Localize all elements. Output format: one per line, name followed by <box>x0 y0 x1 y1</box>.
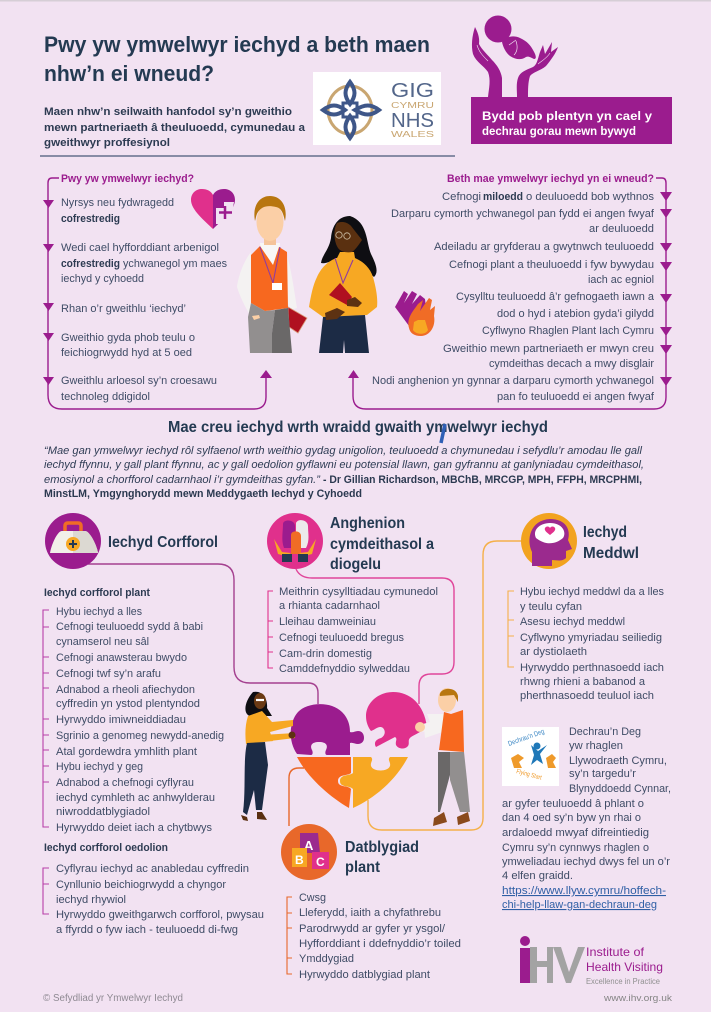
text block: children list: Adnabod a chefnogi cyflyrau <box>56 777 194 789</box>
logo: GIG Cymru NHS Wales: WALES <box>391 130 434 139</box>
subheading: adults: Iechyd corfforol oedolion <box>44 842 168 854</box>
icon: people in hands <box>267 513 323 569</box>
text block: children list: Cefnogi teuluoedd sydd â babi <box>56 621 203 633</box>
icon: alphabet blocks: B <box>295 853 304 867</box>
text block: children list: cynamserol neu sâl <box>56 636 149 648</box>
text block: social list: Cam-drin domestig <box>279 648 372 660</box>
puzzle piece: pink <box>366 692 427 749</box>
heading: social needs <box>330 515 434 573</box>
website: www.ihv.org.uk <box>603 993 672 1004</box>
text block: Flying Start: ardaloedd mwyaf difreintiedig <box>502 827 649 839</box>
text block: what list: Cefnogi <box>442 191 481 203</box>
text block: what list: o deuluoedd bob wythnos <box>526 191 654 203</box>
text block: children list: Hybu iechyd a lles <box>56 606 142 618</box>
heading: who: Pwy yw ymwelwyr iechyd? <box>61 173 194 185</box>
text block: children list: Cefnogi twf sy’n arafu <box>56 668 161 680</box>
text block: what list: ar deuluoedd <box>589 223 654 235</box>
text block: mental health list <box>520 586 664 702</box>
arrow: left flow line <box>43 178 272 409</box>
icon: alphabet blocks: A <box>304 838 314 853</box>
heading: mental health: Iechyd <box>583 524 627 541</box>
bracket: social <box>268 591 273 668</box>
title: Pwy yw ymwelwyr iechyd a beth maen <box>44 32 430 57</box>
panel: who are health visitors <box>43 173 272 409</box>
copyright: © Sefydliad yr Ymwelwyr Iechyd <box>43 993 183 1004</box>
text block: children list: iechyd cymhleth ac anhwylderau <box>56 792 215 804</box>
text block: adults list: Hyrwyddo gweithgarwch corfforol, pwysau <box>56 909 264 921</box>
bracket: children <box>43 610 49 827</box>
heading: child development: plant <box>345 859 381 876</box>
heading: social needs: cymdeithasol a <box>330 536 434 553</box>
text block: children list: Hybu iechyd y geg <box>56 761 143 773</box>
text block: adults list: Cynllunio beichiogrwydd a chyngor <box>56 879 226 891</box>
logo: Institute of Health Visiting <box>520 936 663 986</box>
text block: children list: Hyrwyddo imiwneiddiadau <box>56 714 186 726</box>
heading: child development: Datblygiad <box>345 839 419 856</box>
logo: Institute of Health Visiting: Health Visiting <box>586 960 663 974</box>
text block: social list: a rhianta cadarnhaol <box>279 600 380 612</box>
logo: GIG Cymru NHS Wales <box>313 72 441 145</box>
illustration: man with puzzle <box>415 688 470 826</box>
logo: GIG Cymru NHS Wales: GIG <box>391 80 434 102</box>
text block: Flying Start: Dechrau’n Deg <box>569 726 641 738</box>
arrow: right flow line <box>348 178 672 409</box>
puzzle piece: purple <box>291 704 364 755</box>
heading: health creation: Mae creu iechyd wrth wraidd gwaith ymwelwyr iechyd <box>168 419 548 436</box>
icon: head with heart <box>521 513 577 569</box>
text block: what list: Nodi anghenion yn gynnar a darparu cymorth ychwanegol <box>372 375 654 387</box>
text block: what list: dod o hyd i atebion gyda’i gilydd <box>497 308 654 320</box>
icon: alphabet blocks <box>281 824 337 880</box>
logo: Institute of Health Visiting: Excellence in Practice <box>586 977 661 986</box>
text block: social list: Meithrin cysylltiadau cymunedol <box>279 586 438 598</box>
sleeves <box>237 252 260 320</box>
text block: Flying Start: ar gyfer teuluoedd â phlant o <box>502 798 644 810</box>
text block: child development list <box>299 892 461 981</box>
logo: Flying Start: Dechrau’n Deg <box>507 728 545 748</box>
text block: mental health list: y teulu cyfan <box>520 601 582 613</box>
text block: mental health list: Hybu iechyd meddwl da a lles <box>520 586 664 598</box>
text block: mental health list: rhwng rhieni a babanod a <box>520 676 646 688</box>
title <box>44 32 430 86</box>
text block: who list: iechyd y cyhoedd <box>61 273 144 285</box>
text block: who list: ychwanegol ym maes <box>123 258 227 270</box>
text block: Flying Start: yw rhaglen <box>569 740 623 752</box>
subtitle: gweithwyr proffesiynol <box>44 137 170 149</box>
text block: what list: pan fo teuluoedd ei angen fwyaf <box>497 391 655 403</box>
text block: what list: cymdeithas decach a mwy disglair <box>489 358 654 370</box>
text block: adults list <box>56 863 264 936</box>
text block: children list: niwroddatblygiadol <box>56 806 150 818</box>
text block: social list <box>279 586 438 675</box>
icon: heart with plus <box>191 189 235 229</box>
heading: physical health: Iechyd Corfforol <box>108 534 218 551</box>
puzzle piece: yellow <box>340 757 408 808</box>
text block: children list: Cefnogi anawsterau bwydo <box>56 652 187 664</box>
title: nhw’n ei wneud? <box>44 61 214 86</box>
banner: dechrau gorau mewn bywyd <box>482 126 636 138</box>
logo: GIG Cymru NHS Wales: NHS <box>391 110 434 132</box>
text block: children list: Sgrinio a genomeg newydd-anedig <box>56 730 224 742</box>
text block: what list: Cyflwyno Rhaglen Plant Iach Cymru <box>482 325 654 337</box>
text block: Flying Start: https://www.llyw.cymru/hoffech- <box>502 885 666 897</box>
text block: Flying Start: Llywodraeth Cymru, <box>569 755 667 767</box>
text block: adults list: Cyflyrau iechyd ac anabledau cyffredin <box>56 863 249 875</box>
text block: Flying Start: 4 elfen graidd. <box>502 870 573 882</box>
text block: mental health list: Cyflwyno ymyriadau seiliedig <box>520 632 662 644</box>
text block: mental health list: ar dystiolaeth <box>520 646 587 658</box>
text block: what list: Cefnogi plant a theuluoedd i fyw bywydau <box>449 259 654 271</box>
text block: mental health list: pherthnasoedd teuluol iach <box>520 690 654 702</box>
text block: children list: Adnabod a rheoli afiechydon <box>56 684 195 696</box>
text block: what list: Adeiladu ar gryfderau a gwytnwch teuluoedd <box>434 241 654 253</box>
text block: who list: cofrestredig <box>61 258 120 270</box>
text block: Flying Start: Blynyddoedd Cynnar, <box>569 783 671 795</box>
text block: adults list: a ffyrdd o fyw iach - teuluoedd di-fwg <box>56 924 238 936</box>
subtitle <box>44 106 306 149</box>
quote <box>44 445 644 500</box>
logo: GIG Cymru NHS Wales: CYMRU <box>391 101 434 110</box>
text block: what list: Darparu cymorth ychwanegol pan fydd ei angen fwyaf <box>391 208 655 220</box>
logo: Flying Start <box>502 727 559 786</box>
text block: Flying Start: dan 4 oed sy’n byw yn rhai o <box>502 812 641 824</box>
vest <box>251 246 288 311</box>
text block: child development list: Hyrwyddo datblygiad plant <box>299 969 430 981</box>
bracket: mental health <box>508 591 514 667</box>
heading: social needs: diogelu <box>330 556 381 573</box>
text block: who list: Gweithio gyda phob teulu o <box>61 332 195 344</box>
panel: physical health <box>43 513 264 936</box>
illustration: woman with puzzle <box>241 692 296 821</box>
trousers <box>248 303 275 353</box>
illustration: woman health visitor <box>309 216 377 353</box>
text block: Flying Start: sy’n targedu’r <box>569 768 636 780</box>
text block: who list: Wedi cael hyfforddiant arbenigol <box>61 242 219 254</box>
text block: child development list: Hyfforddiant i ddefnyddio’r toiled <box>299 938 461 950</box>
text block: social list: Camddefnyddio sylweddau <box>279 663 410 675</box>
text block: what list: Cysylltu teuluoedd â’r gefnogaeth iawn a <box>456 291 655 303</box>
banner: Bydd pob plentyn yn cael y <box>482 111 653 123</box>
bracket: adults <box>43 868 49 914</box>
subtitle: mewn partneriaeth â theuluoedd, cymunedau a <box>44 122 306 134</box>
text block: who list <box>61 197 227 403</box>
puzzle piece: orange <box>297 757 351 808</box>
text block: mental health list: Asesu iechyd meddwl <box>520 616 625 628</box>
book <box>288 307 307 333</box>
quote: - Dr Gillian Richardson, MBChB, MRCGP, MPH, FFPH, MRCPHMI, <box>323 474 642 486</box>
text block: Flying Start <box>502 726 671 911</box>
text block: social list: Lleihau damweiniau <box>279 616 376 628</box>
text block: children list <box>56 606 224 834</box>
text block: who list: feichiogrwydd hyd at 5 oed <box>61 347 192 359</box>
heading: mental health <box>583 524 639 562</box>
banner <box>471 97 672 144</box>
heading: child development <box>345 839 419 876</box>
icon: hands holding baby <box>472 16 558 97</box>
icon: medical bag <box>45 513 101 569</box>
panel: what health visitors do <box>348 173 672 409</box>
heading: social needs: Anghenion <box>330 515 405 532</box>
panel: mental health <box>508 513 664 702</box>
text block: child development list: Lleferydd, iaith a chyfathrebu <box>299 907 441 919</box>
illustration: man health visitor <box>237 196 307 353</box>
heading: what: Beth mae ymwelwyr iechyd yn ei wneud? <box>447 173 654 185</box>
text block: what list <box>372 191 655 403</box>
text block: what list: iach ac egniol <box>588 274 654 286</box>
subheading: children: Iechyd corfforol plant <box>44 587 150 599</box>
text block: child development list: Cwsg <box>299 892 326 904</box>
text block: children list: cyffredin yn ystod plentyndod <box>56 698 200 710</box>
connector lines to puzzle <box>88 541 524 830</box>
text block: who list: Gweithlu arloesol sy’n croesawu <box>61 375 217 387</box>
text block: children list: Atal gordewdra ymhlith plant <box>56 746 197 758</box>
text block: Flying Start: Cymru sy’n cynnwys rhaglen o <box>502 842 649 854</box>
text block: child development list: Parodrwydd ar gyfer yr ysgol/ <box>299 923 446 935</box>
text block: child development list: Ymddygiad <box>299 953 354 965</box>
logo: Flying Start: Flying Start <box>515 768 543 782</box>
text block: who list: cofrestredig <box>61 213 120 225</box>
text block: what list: miloedd <box>483 191 523 203</box>
panel: social needs and safeguarding <box>267 513 438 675</box>
text block: Flying Start: chi-help-llaw-gan-dechraun-deg <box>502 899 657 911</box>
icon: alphabet blocks: C <box>316 855 325 869</box>
subtitle: Maen nhw’n seilwaith hanfodol sy’n gweithio <box>44 106 292 118</box>
text block: adults list: iechyd rhywiol <box>56 894 126 906</box>
logo: Institute of Health Visiting: Institute of <box>586 945 645 959</box>
quote: “Mae gan ymwelwyr iechyd rôl sylfaenol wrth weithio gydag unigolion, teuluoedd a chymunedau i sefydlu’r amodau lle gall <box>44 445 643 457</box>
panel: child development <box>281 824 461 981</box>
quote: iechyd ffynnu, y gall plant ffynnu, ac y gall oedolion gyflawni eu potensial llawn, gan gyfrannu at ganlyniadau cymdeithasol, <box>44 459 644 471</box>
heading: mental health: Meddwl <box>583 545 639 562</box>
quote: MinstLM, Ymgynghorydd mewn Meddygaeth Iechyd y Cyhoedd <box>44 488 362 500</box>
text block: what list: Gweithio mewn partneriaeth er mwyn creu <box>443 343 654 355</box>
shirt collar <box>260 243 280 268</box>
text block: children list: Hyrwyddo deiet iach a chytbwys <box>56 822 212 834</box>
head <box>264 234 276 245</box>
text block: who list: Rhan o’r gweithlu ‘iechyd’ <box>61 303 186 315</box>
text block: Flying Start: ymweliadau iechyd dwys fel un o’r <box>502 856 670 868</box>
icon: overlapping hands <box>395 291 435 336</box>
quote: emosiynol a chorfforol cadarnhaol i’r gymdeithas gyfan.” <box>44 474 321 486</box>
text block: mental health list: Hyrwyddo perthnasoedd iach <box>520 662 664 674</box>
text block: who list: technoleg ddigidol <box>61 391 150 403</box>
illustration: puzzle heart <box>291 692 427 808</box>
bracket: child development <box>287 897 292 974</box>
text block: who list: Nyrsys neu fydwragedd <box>61 197 174 209</box>
text block: social list: Cefnogi teuluoedd bregus <box>279 632 404 644</box>
